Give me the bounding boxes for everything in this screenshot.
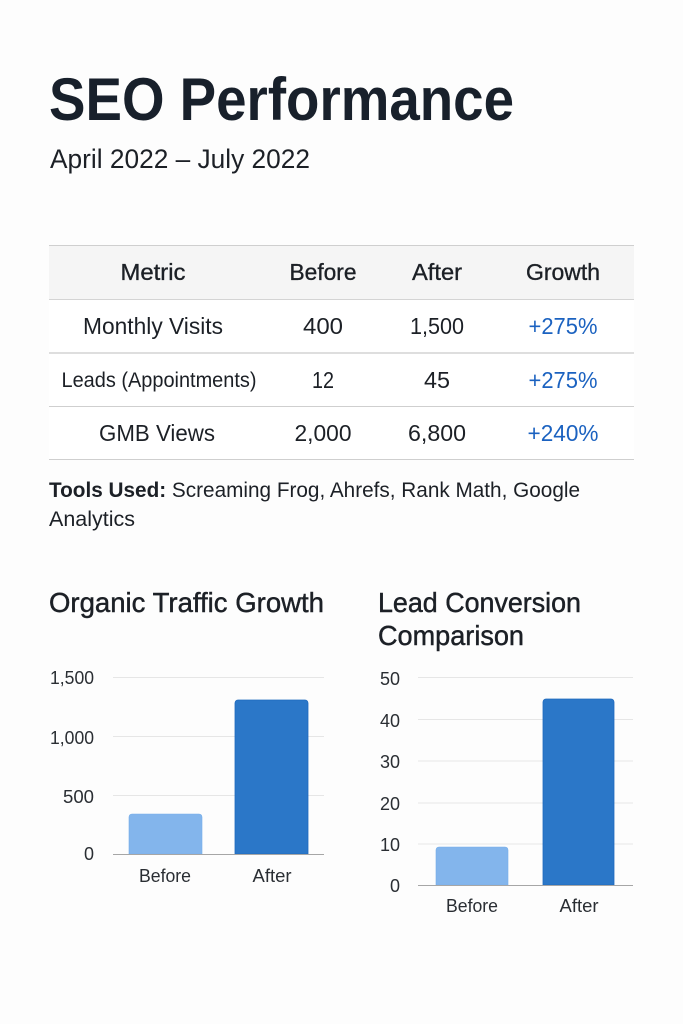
subtitle: date range: April 2022 – July 2022 [50,144,310,174]
heading: lead conversion comparison [378,587,581,651]
table row: leads [62,367,598,393]
text block: tools used: Tools Used: Screaming Frog, Ahrefs, Rank Math, Google [49,479,580,502]
bar: before [436,847,508,885]
text block: tools used [49,479,580,531]
table row: gmb views: GMB Views [99,420,215,446]
x axis labels [139,866,292,886]
table row: gmb views [99,420,598,446]
y axis labels: 30 [380,752,400,772]
table row: monthly visits: 1,500 [410,313,464,339]
table header row: Growth [526,259,600,285]
panel: metrics table [49,246,634,460]
x axis labels: After [560,896,599,916]
table header row: After [412,259,462,285]
heading: lead conversion comparison: Comparison [378,620,524,651]
heading: lead conversion comparison: Lead Conversion [378,587,581,618]
y axis labels [50,668,94,864]
x axis labels: Before [139,866,191,886]
y axis labels: 1,500 [50,668,94,688]
table header row [120,259,600,285]
text block: tools used: Analytics [49,508,135,531]
bar chart: organic traffic growth [50,668,324,886]
y axis labels: 1,000 [50,728,94,748]
y axis labels: 40 [380,711,400,731]
y axis labels: 0 [84,844,94,864]
x axis labels: After [252,866,292,886]
table header row: Metric [120,259,186,285]
table row: leads: 45 [424,367,450,393]
y axis labels: 20 [380,794,400,814]
table row: leads: Leads (Appointments) [62,369,256,392]
table row: gmb views: +240% [528,420,598,446]
heading: organic traffic growth: Organic Traffic Growth [49,587,324,618]
table header row: Before [290,259,356,285]
table row: monthly visits: 400 [303,313,343,339]
table row: monthly visits: Monthly Visits [83,313,223,339]
table row: monthly visits [83,313,598,339]
y axis labels: 10 [380,835,400,855]
bar: after [543,699,614,885]
x axis labels [446,896,599,916]
table row: gmb views: 6,800 [408,420,466,446]
bar: before [129,814,202,854]
table row: leads: +275% [528,367,598,393]
bar: after [235,700,308,854]
table row: monthly visits: +275% [528,313,598,339]
table row: leads: 12 [312,367,334,393]
table row: gmb views: 2,000 [294,420,352,446]
title: SEO Performance [49,66,514,133]
y axis labels [380,669,400,896]
bar chart: lead conversion comparison [380,669,633,916]
y axis labels: 0 [390,876,400,896]
y axis labels: 500 [63,787,94,807]
x axis labels: Before [446,896,498,916]
y axis labels: 50 [380,669,400,689]
